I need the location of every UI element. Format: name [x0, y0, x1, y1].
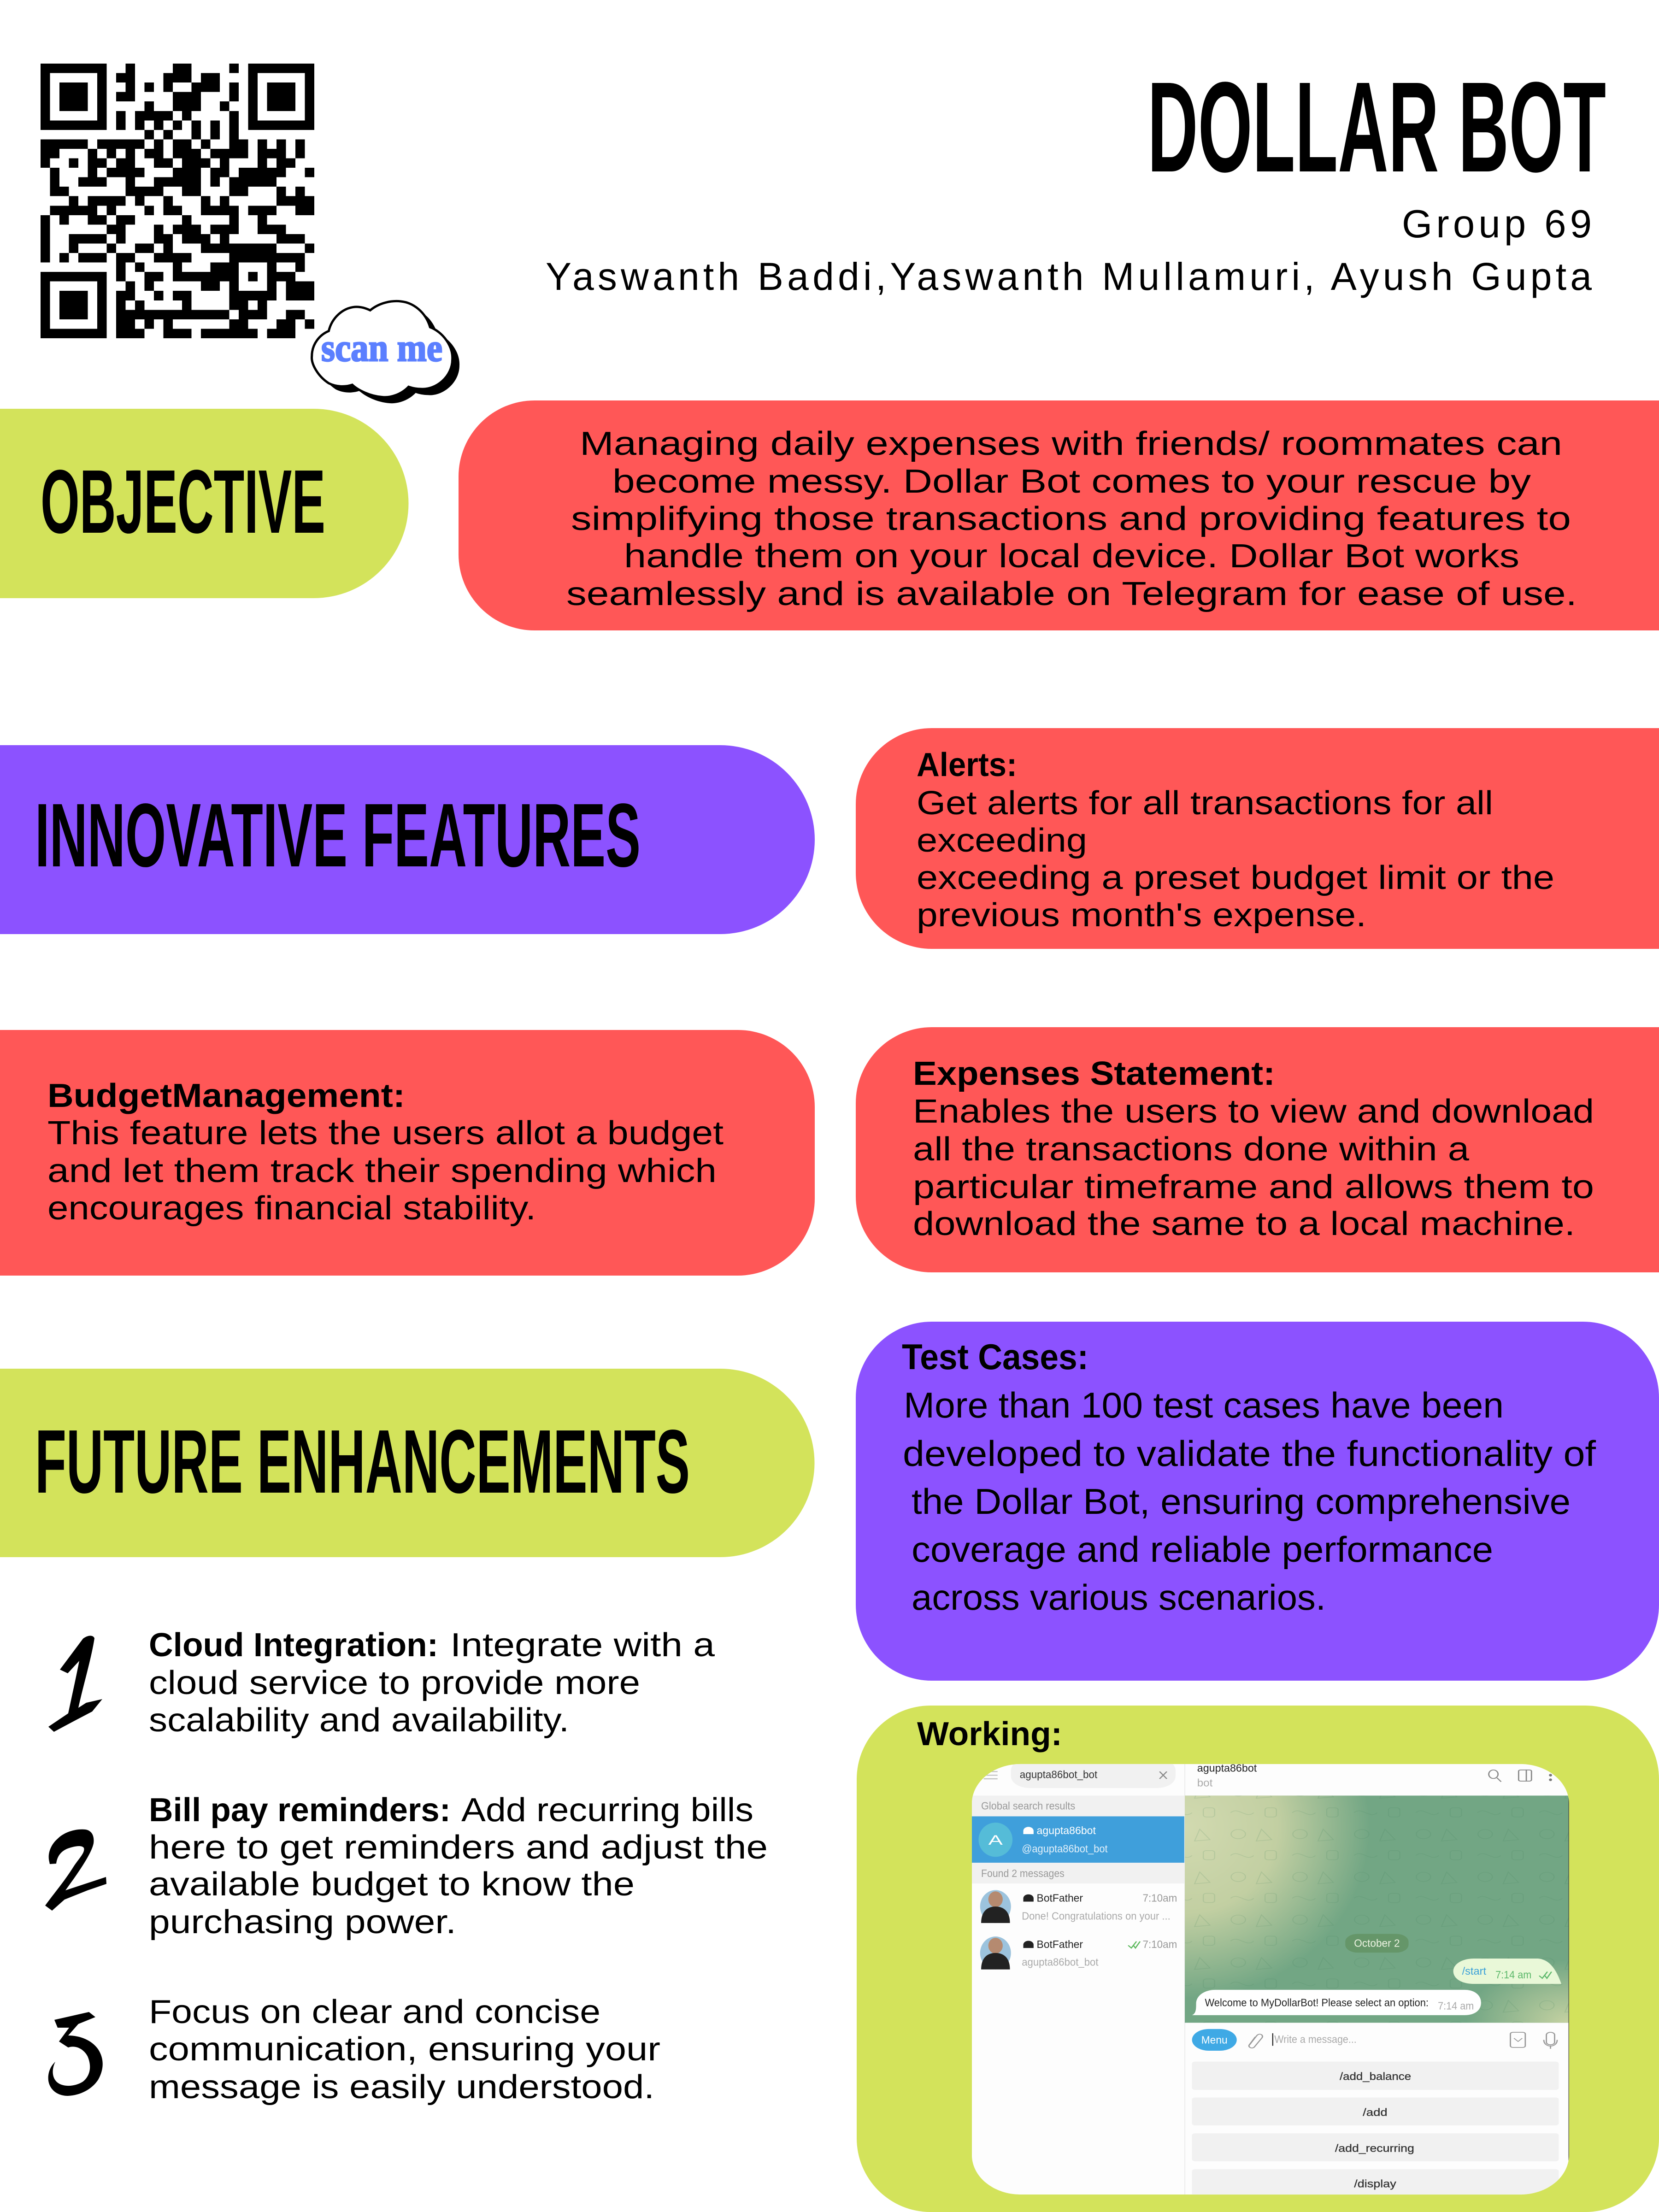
- list item 2 text: Add recurring bills: [461, 1792, 753, 1829]
- list item 1 text: Integrate with a: [450, 1627, 715, 1664]
- search results sidebar: BotFather: [1037, 1893, 1083, 1904]
- search bar: agupta86bot_bot: [1020, 1769, 1098, 1781]
- search results sidebar: @agupta86bot_bot: [1022, 1843, 1108, 1855]
- panel: expenses statement: Expenses Statement:: [913, 1055, 1275, 1092]
- panel: future enhancements heading: FUTURE ENHANCEMENTS: [35, 1411, 690, 1512]
- icon: brush numeral 2: [45, 1830, 106, 1911]
- group label: Group 69: [1402, 202, 1592, 246]
- chat header: agupta86bot: [1197, 1762, 1257, 1774]
- panel: expenses statement: [856, 1027, 1659, 1272]
- panel: alerts: exceeding: [917, 822, 1087, 859]
- QR code: [41, 64, 314, 338]
- panel: test cases: developed to validate the functionality of: [903, 1433, 1596, 1474]
- search results sidebar: Global search results: [981, 1800, 1075, 1812]
- panel: objective heading: OBJECTIVE: [41, 451, 325, 552]
- list item 3 text: message is easily understood.: [149, 2069, 654, 2106]
- panel: objective text: seamlessly and is available on Telegram for ease of use.: [566, 576, 1577, 612]
- list item 2 text: purchasing power.: [149, 1904, 456, 1941]
- search results sidebar: Done! Congratulations on your ...: [1022, 1911, 1171, 1922]
- panel: alerts: exceeding a preset budget limit or the: [917, 859, 1554, 896]
- panel: budget management: [0, 1030, 815, 1276]
- search results sidebar: Found 2 messages: [981, 1868, 1065, 1879]
- incoming message: [1192, 1990, 1481, 2015]
- panel: test cases: [856, 1322, 1659, 1681]
- keyboard buttons: [1192, 2062, 1559, 2199]
- outgoing message: 7:14 am: [1495, 1969, 1531, 1981]
- panel: test cases: across various scenarios.: [912, 1577, 1326, 1618]
- list item 1 text: [149, 1627, 715, 1739]
- chat header: bot: [1197, 1777, 1213, 1789]
- keyboard buttons: /add: [1363, 2107, 1388, 2118]
- panel: innovative features heading: INNOVATIVE FEATURES: [35, 785, 641, 886]
- list item 2 text: here to get reminders and adjust the: [149, 1829, 768, 1866]
- search results sidebar: agupta86bot_bot: [1022, 1957, 1099, 1968]
- list item 2 text: Bill pay reminders:: [149, 1792, 451, 1829]
- panel: budget management: encourages financial stability.: [47, 1190, 536, 1227]
- list item 3 text: communication, ensuring your: [149, 2031, 660, 2068]
- list item 2 text: [149, 1792, 768, 1941]
- panel: objective text: handle them on your local device. Dollar Bot works: [624, 538, 1519, 575]
- date badge: [1345, 1934, 1409, 1953]
- panel: alerts: [856, 728, 1659, 949]
- panel: innovative features heading: [0, 745, 815, 934]
- incoming message: Welcome to MyDollarBot! Please select an option:: [1205, 1997, 1429, 2009]
- panel: alerts: previous month's expense.: [917, 897, 1366, 934]
- panel: expenses statement: particular timeframe and allows them to: [913, 1169, 1594, 1206]
- search results sidebar: agupta86bot: [1037, 1825, 1096, 1836]
- panel: expenses statement: download the same to a local machine.: [913, 1206, 1575, 1242]
- panel: test cases: Test Cases:: [902, 1336, 1088, 1377]
- icon: brush numeral 3: [48, 2012, 103, 2096]
- scan me cloud badge: scan me: [321, 326, 442, 370]
- panel: expenses statement: Enables the users to view and download: [913, 1093, 1594, 1130]
- incoming message: 7:14 am: [1438, 2000, 1474, 2012]
- chat wallpaper: [1185, 1795, 1569, 2023]
- telegram screenshot: [972, 1759, 1569, 2199]
- search results sidebar: BotFather: [1037, 1939, 1083, 1950]
- panel: objective text: Managing daily expenses with friends/ roommates can: [580, 425, 1562, 462]
- chat header: [1197, 1762, 1552, 1789]
- panel: future enhancements heading: [0, 1369, 815, 1557]
- outgoing message: /start: [1462, 1965, 1487, 1977]
- search results sidebar: [972, 1795, 1185, 1970]
- keyboard buttons: /add_balance: [1340, 2071, 1411, 2083]
- search bar: [983, 1764, 1176, 1788]
- search results sidebar: A: [988, 1832, 1003, 1848]
- panel: budget management: BudgetManagement:: [47, 1077, 405, 1114]
- list item 3 text: [149, 1994, 660, 2106]
- panel: test cases: the Dollar Bot, ensuring comprehensive: [912, 1481, 1571, 1522]
- message input: Write a message...: [1274, 2034, 1357, 2045]
- search results sidebar: 7:10am: [1142, 1939, 1177, 1950]
- date badge: October 2: [1354, 1937, 1400, 1949]
- list item 2 text: available budget to know the: [149, 1866, 635, 1903]
- panel: alerts: Alerts:: [917, 747, 1017, 783]
- panel: objective text: [459, 400, 1659, 630]
- keyboard buttons: /display: [1354, 2178, 1396, 2190]
- list item 3 text: Focus on clear and concise: [149, 1994, 600, 2030]
- outgoing message: [1453, 1959, 1561, 1984]
- search results sidebar: 7:10am: [1142, 1893, 1177, 1904]
- keyboard buttons: /add_recurring: [1335, 2142, 1414, 2154]
- working heading: Working:: [917, 1716, 1062, 1753]
- scan me cloud badge: [312, 301, 459, 403]
- panel: working: [857, 1706, 1659, 2212]
- panel: test cases: More than 100 test cases have been: [904, 1385, 1504, 1425]
- panel: objective text: simplifying those transactions and providing features to: [571, 500, 1571, 537]
- panel: objective heading: [0, 409, 408, 598]
- message input: [1192, 2029, 1557, 2051]
- panel: alerts: Get alerts for all transactions for all: [917, 785, 1493, 822]
- list item 1 text: Cloud Integration:: [149, 1627, 438, 1664]
- list item 1 text: cloud service to provide more: [149, 1665, 640, 1701]
- panel: expenses statement: all the transactions done within a: [913, 1131, 1470, 1168]
- panel: budget management: This feature lets the users allot a budget: [47, 1115, 724, 1152]
- panel: objective text: become messy. Dollar Bot comes to your rescue by: [612, 463, 1531, 500]
- panel: budget management: and let them track their spending which: [47, 1153, 717, 1189]
- panel: test cases: coverage and reliable performance: [912, 1529, 1493, 1570]
- message input: Menu: [1201, 2034, 1228, 2046]
- author names: Yaswanth Baddi,Yaswanth Mullamuri, Ayush Gupta: [546, 255, 1592, 298]
- icon: brush numeral 1: [48, 1635, 102, 1732]
- list item 1 text: scalability and availability.: [149, 1702, 569, 1739]
